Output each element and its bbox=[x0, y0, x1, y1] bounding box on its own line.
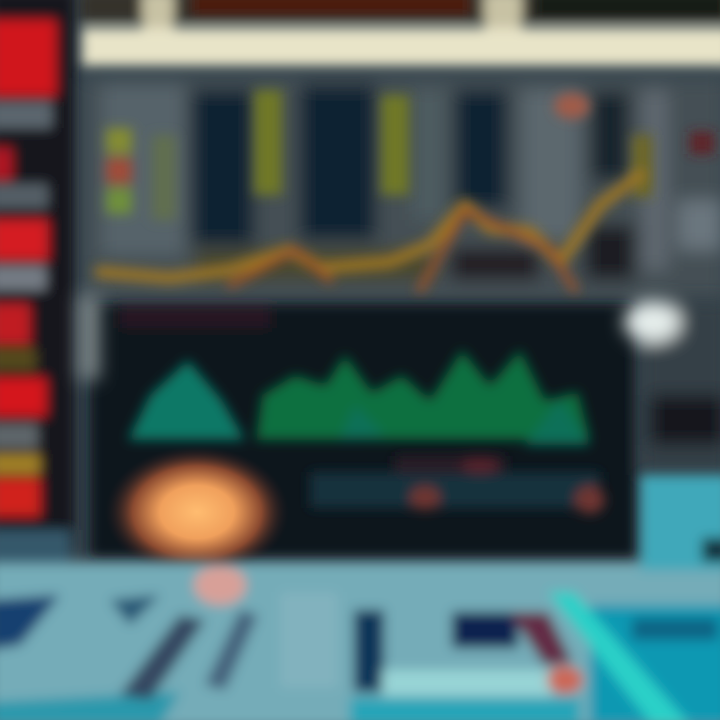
chart: orange trend line bbox=[100, 175, 640, 290]
icon: orange glow bbox=[105, 446, 289, 578]
panel: right side blurred objects bbox=[78, 295, 720, 475]
chart: green area peaks bbox=[128, 350, 590, 445]
chart: olive and coloured bars bbox=[106, 90, 714, 220]
panel: left sidebar with red blocks bbox=[0, 0, 75, 570]
panel: dark lower screen bbox=[90, 304, 636, 558]
chart: dim lower indicators bbox=[310, 456, 605, 514]
chart: upper candlestick columns bbox=[85, 78, 720, 300]
panel: lower cyan keyboard area bbox=[0, 475, 720, 720]
panel: top cream frame bbox=[80, 0, 720, 66]
